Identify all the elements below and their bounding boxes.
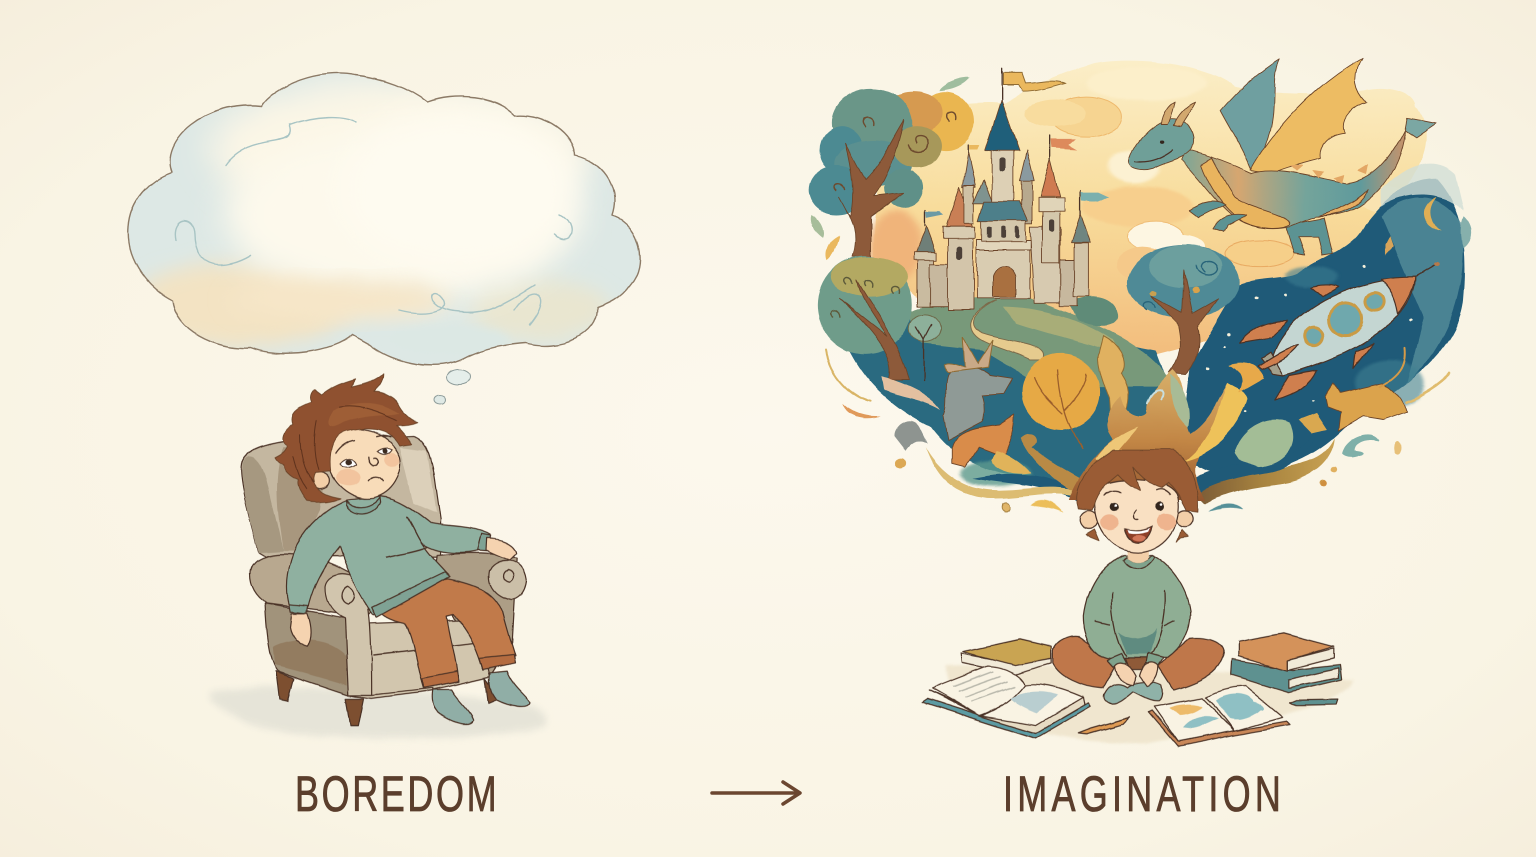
centre tree [1127,245,1240,375]
small paint drops [1002,466,1337,513]
green sweater [1083,555,1190,686]
pencil on floor [1078,717,1130,734]
sad face [309,429,401,499]
heading: boredom label: BOREDOM [295,767,497,822]
crossed legs [1053,636,1223,704]
legs and socks [382,578,530,724]
flying leaves and swirls [810,77,1472,486]
golden creature [1325,348,1407,432]
goat creature [943,337,1030,474]
green sweater [287,497,491,617]
floor shadow [210,687,547,738]
green hill with path [908,297,1173,387]
teal pencil [1290,700,1338,706]
lower left swirl sea [843,317,1173,482]
flowing hair [926,370,1334,504]
heading: imagination label: IMAGINATION [1003,767,1281,822]
floor shadow [947,666,1353,743]
golden sky [869,61,1426,357]
open picture book [1148,686,1290,747]
armchair [241,435,527,727]
bored boy in armchair [210,373,547,738]
thought bubbles [434,370,471,404]
hands [290,538,517,647]
back left book [962,639,1052,674]
right book stack [1231,633,1342,693]
smiling face [1080,479,1194,552]
happy boy with books [922,450,1353,747]
top left tree [809,88,973,257]
imaginary world [809,58,1472,504]
messy brown hair [275,373,417,503]
mid left tree [817,256,941,410]
panel: boredom [128,73,640,738]
arrow [712,782,800,804]
panel: imagination [809,58,1472,747]
open text book [922,666,1091,738]
dragon [1129,58,1435,255]
empty thought cloud [128,73,640,365]
moon and stars [1206,197,1442,413]
golden round tree [1022,337,1128,450]
neck [1127,548,1148,562]
rocket exhaust flames [1229,363,1264,393]
hair fringe [1077,450,1199,542]
castle [914,68,1110,310]
rocket [1240,263,1439,400]
right night sky [1182,178,1465,475]
